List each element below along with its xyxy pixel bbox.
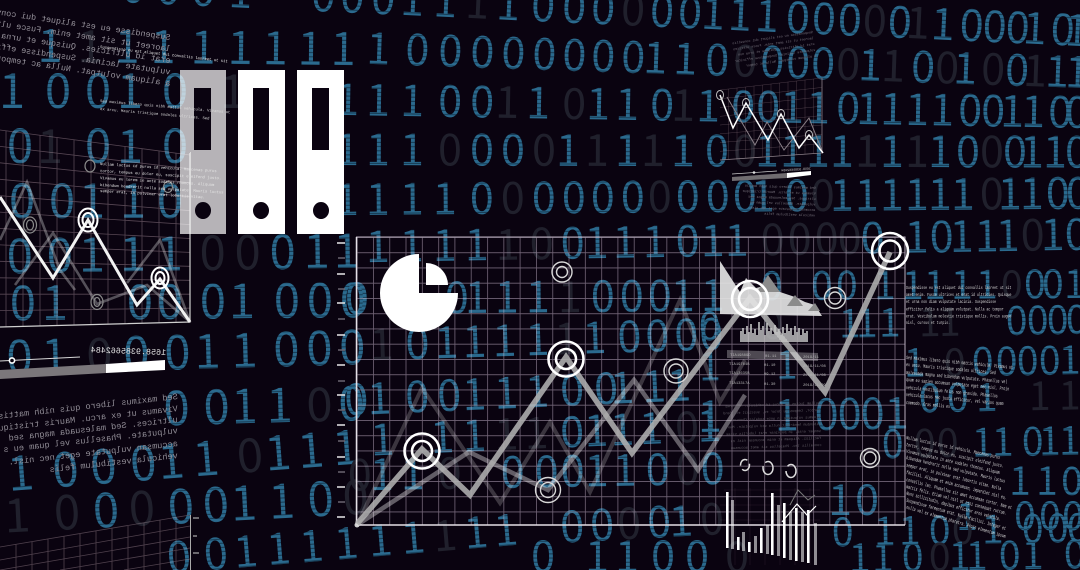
background: binary digit rows: 0 <box>559 398 585 461</box>
text block: right column middle <box>906 355 1014 410</box>
background: binary digit rows: 1111111 <box>366 351 692 428</box>
background: binary digit rows: 0 <box>305 366 333 436</box>
background: binary digit rows: 111111111111111 <box>335 66 1046 140</box>
background: binary digit rows: 00000 <box>698 289 1080 352</box>
background: binary digit rows: 0 <box>761 295 784 351</box>
data table: 01.10 <box>764 364 776 368</box>
small text: mirrored top block over mini chart: laoreet ut sit amet enim. Fusce ultrices <box>733 36 814 52</box>
large ring markers <box>404 233 908 468</box>
left chart main line <box>0 197 190 322</box>
background: binary digit rows: 000 <box>50 424 159 501</box>
background: binary digit rows: 1111111111111 <box>335 160 1044 228</box>
background: binary digit rows: 00 <box>918 367 969 424</box>
background: binary digit rows: 0000 <box>91 460 335 542</box>
background: binary digit rows: 000000 <box>470 116 1080 181</box>
background: binary digit rows: 00000 <box>345 262 672 327</box>
background: binary digit rows: 0 <box>85 316 113 386</box>
background: binary digit rows: 11 <box>1009 451 1058 507</box>
slider with progress bar and value: 1658.9385662484 <box>91 345 166 358</box>
background: binary digit rows: 11 <box>369 305 579 373</box>
mirrored dim text block <box>723 401 822 451</box>
background: binary digit rows: 1111 <box>698 330 1080 393</box>
background: binary digit rows: 00 <box>881 411 1044 470</box>
background: binary digit rows: 1 <box>117 108 143 177</box>
background: binary digit rows: 111 <box>697 380 909 445</box>
data table: 2019/11/08 <box>803 373 827 378</box>
small text: mirrored top block over mini chart: erat id ultricies. Quisque et urna non <box>738 42 815 58</box>
small white text: third block: tortor, tempus eu dolor eu, suscipit eleifend justo. <box>100 169 221 181</box>
text block: right column bottom: tortor, tempus eu dolor eu, suscipit eleifend justo. <box>905 443 1004 470</box>
small white text: third block: bibendum hendrerit nulla sed vulputate. Mauris luctus <box>100 183 224 196</box>
background: binary digit rows: 0 <box>674 393 700 456</box>
background: binary digit rows: 111 <box>40 312 258 387</box>
data table: TIA13317A <box>729 382 750 386</box>
background: binary digit rows: 1111 <box>369 437 637 503</box>
text block: right column top: efficitur felis a aliquam volutpat. Nulla ac tempor <box>906 307 1004 313</box>
background: binary digit rows: 0 <box>1001 254 1023 310</box>
background: binary digit rows: 0000 <box>501 160 1004 227</box>
text block: right column bottom: Suspendisse fermentum erat. Nulla facilisi. Integer et <box>905 498 1007 532</box>
ring over area chart <box>732 281 768 317</box>
mirrored text block, lower left <box>0 392 178 475</box>
background: binary digit rows: 1 <box>956 486 978 542</box>
background: binary digit rows: 0 <box>234 416 265 487</box>
text block: right column middle: commodo. Cras mollis ex <box>906 400 951 410</box>
small text: mirrored top block over mini chart: a aliquam volutpat. Nulla ac tempor <box>745 54 817 69</box>
background: binary digit rows: 000000 <box>529 201 1045 272</box>
mirrored dim text block: convallis leo. Phasellus sit amet accumsan <box>731 443 822 451</box>
background: binary digit rows: 0000 <box>971 330 1061 388</box>
mirrored dim text block: tortor, tempus eu dolor eu, suscipit eleifend <box>723 408 820 416</box>
background: binary digit rows: 11 <box>493 399 549 463</box>
small white text: second block <box>100 99 231 122</box>
background: binary digit rows: 0 <box>562 70 587 132</box>
background: binary digit rows: 000 <box>7 108 188 177</box>
main chart grid <box>354 237 905 528</box>
data table <box>727 350 827 388</box>
background: binary digit rows: 0 <box>951 500 974 556</box>
small white text: third block: semper erat, in pulvinar erat lobortis vitae. <box>100 189 205 200</box>
left chart faint lines <box>0 182 190 322</box>
mirrored dim text block: bibendum hendrerit nulla sed vulputate. Mau <box>728 422 821 430</box>
mirrored dim text block: semper erat, in pulvinar erat lobortis vitae <box>726 429 821 437</box>
data table: 01.11 <box>765 355 777 359</box>
mirrored text block, lower left: vehicula vestibulum felis <box>49 451 178 475</box>
background: binary digit rows: 00 <box>615 485 725 553</box>
text block: right column middle: vehicula vestibulum felis non gravida. Phasellus <box>906 385 998 400</box>
background: binary digit rows: 1 <box>77 10 103 76</box>
small white text: second block: Sed maximus libero quis nibh mattis vehicula. Vivamus ut <box>100 99 231 115</box>
background: binary digit rows: 00000000000000 <box>405 16 1030 99</box>
second data line <box>357 380 745 525</box>
background: binary digit rows: 00000000000 <box>470 160 1080 227</box>
text block: right column bottom: Nunc sollicitudin, dapibus efficitur eros vehicula. <box>905 491 1001 523</box>
background: binary digit rows: 00000 <box>761 254 1064 312</box>
background: binary digit rows: 11 <box>1028 365 1080 422</box>
binders <box>180 70 344 234</box>
small white text: third block: Vivamus eu lorem in ante sodales rhoncus. Aliquam <box>100 176 215 188</box>
three small rotating indicators <box>740 460 796 478</box>
small white text: header line: Suspendisse eu est aliquet dui convallis laoreet ut sit <box>100 45 228 65</box>
background: binary digit rows: 00000 <box>560 201 1080 272</box>
background: binary digit rows: 000 <box>9 163 183 232</box>
data table: 2019/11/09 <box>803 383 827 388</box>
background: binary digit rows: 1 <box>828 466 852 528</box>
background: binary digit rows: 11 <box>880 32 1048 100</box>
small text: mirrored top block over mini chart: vulputate lacinia. Suspendisse efficitur <box>734 48 816 64</box>
histogram under area chart <box>741 322 807 342</box>
data table: 2019/11/08 <box>803 364 827 369</box>
mirrored text block, top left: a aliquam volutpat. Nulla ac tempor <box>0 53 171 89</box>
text block: right column middle: ex arcu. Mauris tristique sodales ultrices. Sed <box>906 362 996 377</box>
background: binary digit rows: 11111 <box>433 304 607 371</box>
background: binary digit rows: 000 <box>52 459 370 544</box>
background: binary digit rows: 0000000000 <box>438 68 1080 141</box>
bar chart, bottom centre <box>720 488 820 565</box>
background: binary digit rows: 11 <box>0 53 143 122</box>
small white text: third block <box>100 162 224 200</box>
text block: right column bottom: nulla vel ex elementum pharetra. Proin elementum ipsum <box>905 505 1007 540</box>
mirrored text block, lower left: Sed maximus libero quis nibh mattis <box>0 392 178 422</box>
background: binary digit rows: 000 <box>6 214 296 287</box>
background: binary digit rows: 1 <box>2 476 32 547</box>
background: binary digit rows: 00000 <box>500 435 725 501</box>
background: binary digit rows: 00000 <box>405 300 724 372</box>
background: binary digit rows: 11 <box>495 69 696 134</box>
text block: right column middle: vehicula lacus nec justo efficitur, vel varius quam <box>906 392 1004 407</box>
text block: right column middle: malesuada magna sed bibendum vulputate. Phasellus vel <box>906 370 1008 386</box>
background: binary digit rows: 11 <box>79 163 146 232</box>
background: binary digit rows: 11111111111111 <box>365 201 1065 275</box>
mirrored text block, lower left: ultrices. Sed malesuada magna sed <box>8 415 178 444</box>
area chart: mountain shapes <box>720 261 822 316</box>
small white text: third block: Nullam luctus id purus id vehicula. Maecenas purus <box>100 162 217 174</box>
text block: right column top: Suspendisse eu est aliquet dui convallis laoreet ut sit <box>906 285 1012 291</box>
background: binary digit rows: 00000 <box>343 355 619 429</box>
mini slider and value <box>732 167 811 181</box>
text block: right column bottom: facilisi. Aliquam et enim accumsan, imperdiet nisl eu, <box>905 470 1007 502</box>
background: binary digit rows: 1111111 <box>369 392 722 468</box>
text block: right column bottom: convallis leo. Phasellus sit amet accumsan tortor. Nam et <box>905 478 1013 512</box>
background: binary digit rows: 0 <box>943 332 966 388</box>
mirrored text block, lower left: accumsan vulputate eget nec nisl. <box>8 439 178 468</box>
icon: pie chart <box>380 254 458 332</box>
background: binary digit rows: 1111 <box>971 411 1080 469</box>
mirrored dim text block: Vivamus vulputate in ante sodales rhoncus. <box>730 415 821 423</box>
mini slider and value: 1658.9385662484 <box>781 167 811 173</box>
small text: mirrored lower block under mini chart: accumsan vulputate eget nec nisl. <box>748 206 815 213</box>
background: binary digit rows: 000 <box>814 380 885 443</box>
background: binary digit rows: 0000 <box>438 116 1004 180</box>
small text: mirrored lower block under mini chart: ultrices. Sed malesuada magna sed <box>748 195 816 202</box>
text block: right column top: et urna non diam vulputate lacinia. Suspendisse <box>906 299 996 305</box>
data table: 2019/11 <box>803 355 820 360</box>
small text: mirrored lower block under mini chart: Vivamus ut ex arcu. Mauris tristique <box>743 189 816 196</box>
text block: right column middle: Sed maximus libero quis nibh mattis vehicula. Vivamus ut <box>906 355 1014 371</box>
background: binary digit rows: 11111 <box>78 213 360 286</box>
background: binary digit rows: 000000 <box>5 309 366 388</box>
background: binary digit rows: 11111 <box>465 262 725 326</box>
mini line chart, top right <box>716 78 823 160</box>
mirrored dim text block: facilisi. Aliquam et enim accumsan nisl eu <box>731 436 821 444</box>
background: binary digit rows: 111111 <box>874 254 1080 311</box>
small text: mirrored top block over mini chart: Suspendisse eu est aliquet dui convallis <box>732 30 813 46</box>
background: binary digit rows: 1 <box>667 487 694 550</box>
background: binary digit rows: 000 <box>559 488 672 556</box>
background: binary digit rows: 000 <box>163 365 365 439</box>
background: binary digit rows: 111111 <box>5 409 361 505</box>
text block: right column top: erat. Vestibulum molestie tristique mollis. Proin augue <box>906 314 1012 320</box>
data table: 09.12 <box>764 373 776 377</box>
bottom-left grid with ticks <box>0 515 199 570</box>
background: binary digit rows: 11 <box>229 463 296 535</box>
text block: right column bottom <box>905 436 1013 540</box>
background: binary digit rows: 0 <box>855 466 879 528</box>
small text: mirrored top block over mini chart <box>732 30 817 70</box>
small text: mirrored lower block under mini chart: Sed maximus libero quis nibh mattis <box>745 184 816 191</box>
mirrored text block, top left <box>0 4 171 89</box>
background: binary digit rows: 0000 <box>732 27 1006 98</box>
data table: TIA19889D <box>730 354 751 358</box>
background: binary digit rows: 111 <box>838 293 901 350</box>
background: binary digit rows: 1 <box>975 367 998 423</box>
background: binary digit rows: 11 <box>918 292 961 348</box>
text block: right column top: amet enim. Fusce ultrices et erat id ultricies. Quisque <box>906 292 1012 298</box>
text block: right column bottom: Nullam luctus id purus id vehicula. Maecenas purus <box>906 436 1001 461</box>
background: binary digit rows: 0000000 <box>9 262 366 334</box>
text block: right column middle: quam eu sapien accumsan vulputate eget nec nisl. Proin <box>906 377 1010 393</box>
small text: mirrored lower block under mini chart: vulputate. Phasellus vel quam eu <box>750 200 816 207</box>
background: binary digit rows: 1111 <box>585 117 929 180</box>
small text: mirrored lower block under mini chart <box>742 183 816 218</box>
background: binary digit rows: 1 <box>37 108 63 177</box>
data table: TIA13635B <box>729 372 750 376</box>
background: binary digit rows: 111 <box>873 499 1004 557</box>
background: binary digit rows: 000 <box>45 53 188 122</box>
third data line (faint) <box>357 300 745 525</box>
background: binary digit rows: 00 <box>913 413 959 470</box>
mirrored text block, lower left: vulputate. Phasellus vel quam eu s <box>3 426 178 455</box>
left line chart grid <box>0 130 190 327</box>
background: binary digit rows: 11 <box>41 263 255 334</box>
background: binary digit rows: 1 <box>558 263 582 325</box>
background: binary digit rows: 000 <box>347 435 700 504</box>
text block: right column top <box>906 285 1012 326</box>
data table: TIA19764B <box>729 363 750 367</box>
small white text: second block: ex arcu. Mauris tristique sodales ultrices. Sed <box>100 107 210 122</box>
left chart ring markers <box>24 160 172 310</box>
data table: 01.30 <box>764 383 776 387</box>
main chart axis ticks <box>337 243 345 517</box>
main data line <box>357 252 890 524</box>
background: binary digit rows: 11111111 <box>37 10 356 78</box>
small ring markers <box>536 262 880 502</box>
background: binary digit rows: 1 <box>495 211 520 273</box>
left chart vertical guide <box>190 152 192 234</box>
background: binary digit rows: 1 <box>430 501 459 565</box>
background: binary digit rows: 11 <box>230 367 293 438</box>
small text: mirrored lower block under mini chart: vehicula vestibulum felis <box>764 212 815 218</box>
background: binary digit rows: 1111111 <box>366 15 1080 101</box>
text block: right column bottom: semper erat, in pulvinar erat lobortis vitae. Nulla <box>905 463 1002 493</box>
background: binary digit rows: 1 <box>220 53 246 122</box>
background: binary digit rows: 11111111111111 <box>335 116 1067 181</box>
text block: right column bottom: bibendum hendrerit nulla sed vulputate. Mauris luctus <box>905 456 1006 485</box>
text block: right column bottom: mattis felis. Etiam vel nisl ut nisi consequat rutrum. <box>905 485 1007 517</box>
mirrored dim text block: Nullam luctus id purus id vehicula. Maecenas <box>725 401 820 409</box>
background: binary digit rows: 00 <box>199 214 261 284</box>
slider with progress bar and value <box>0 345 166 379</box>
text block: right column bottom: Vivamus vulputate in ante sodales rhoncus. Aliquam <box>905 449 1000 476</box>
text block: right column top: nisl, cursus et turpis. <box>906 320 950 326</box>
